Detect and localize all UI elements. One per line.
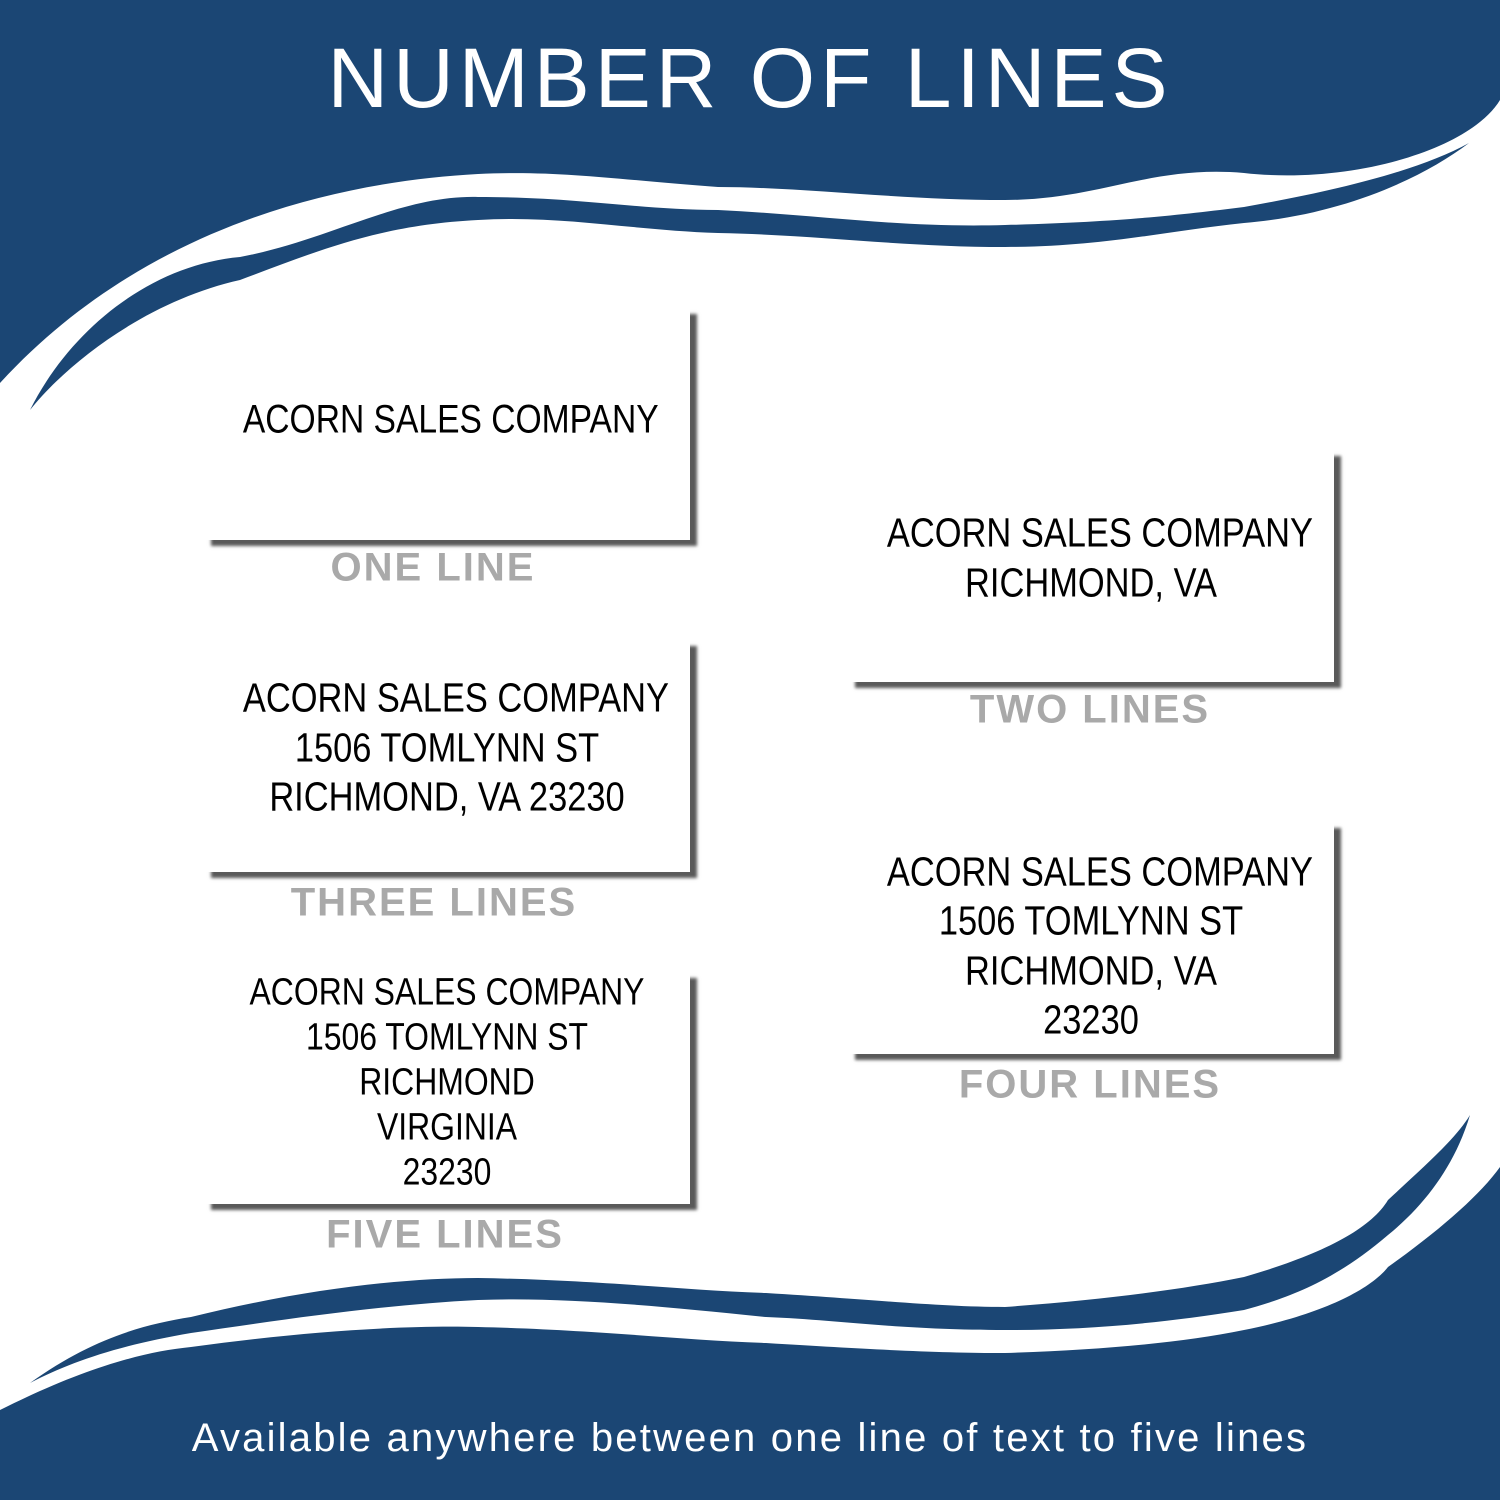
panel: five lines: ACORN SALES COMPANY <box>250 972 644 1014</box>
panel: three lines: ACORN SALES COMPANY <box>243 674 669 720</box>
panel: five lines: VIRGINIA <box>377 1106 517 1148</box>
label: one line: ONE LINE <box>331 546 535 590</box>
label: three lines: THREE LINES <box>291 880 577 924</box>
panel: five lines: 1506 TOMLYNN ST <box>306 1016 588 1058</box>
panel: one line <box>204 308 690 540</box>
footer text: Available anywhere between one line of text to five lines <box>192 1416 1308 1460</box>
panel: three lines <box>204 640 690 872</box>
label: five lines: FIVE LINES <box>326 1212 564 1256</box>
panel: four lines <box>848 822 1334 1054</box>
panel: five lines: 23230 <box>403 1152 491 1194</box>
panel: two lines: RICHMOND, VA <box>965 560 1217 606</box>
panel: four lines: 1506 TOMLYNN ST <box>939 898 1243 944</box>
panel: four lines: 23230 <box>1043 996 1139 1042</box>
panel: one line: ACORN SALES COMPANY <box>243 398 659 442</box>
label: four lines: FOUR LINES <box>959 1062 1221 1106</box>
panel: two lines: ACORN SALES COMPANY <box>887 510 1313 556</box>
title: NUMBER OF LINES <box>327 31 1173 125</box>
panel: three lines: 1506 TOMLYNN ST <box>295 724 599 770</box>
panel: four lines: RICHMOND, VA <box>965 948 1217 994</box>
label: two lines: TWO LINES <box>970 688 1210 732</box>
panel: four lines: ACORN SALES COMPANY <box>887 848 1313 894</box>
panel: five lines: RICHMOND <box>359 1062 535 1104</box>
panel: five lines <box>204 972 690 1204</box>
panel: three lines: RICHMOND, VA 23230 <box>269 774 625 820</box>
panel: two lines <box>848 450 1334 682</box>
